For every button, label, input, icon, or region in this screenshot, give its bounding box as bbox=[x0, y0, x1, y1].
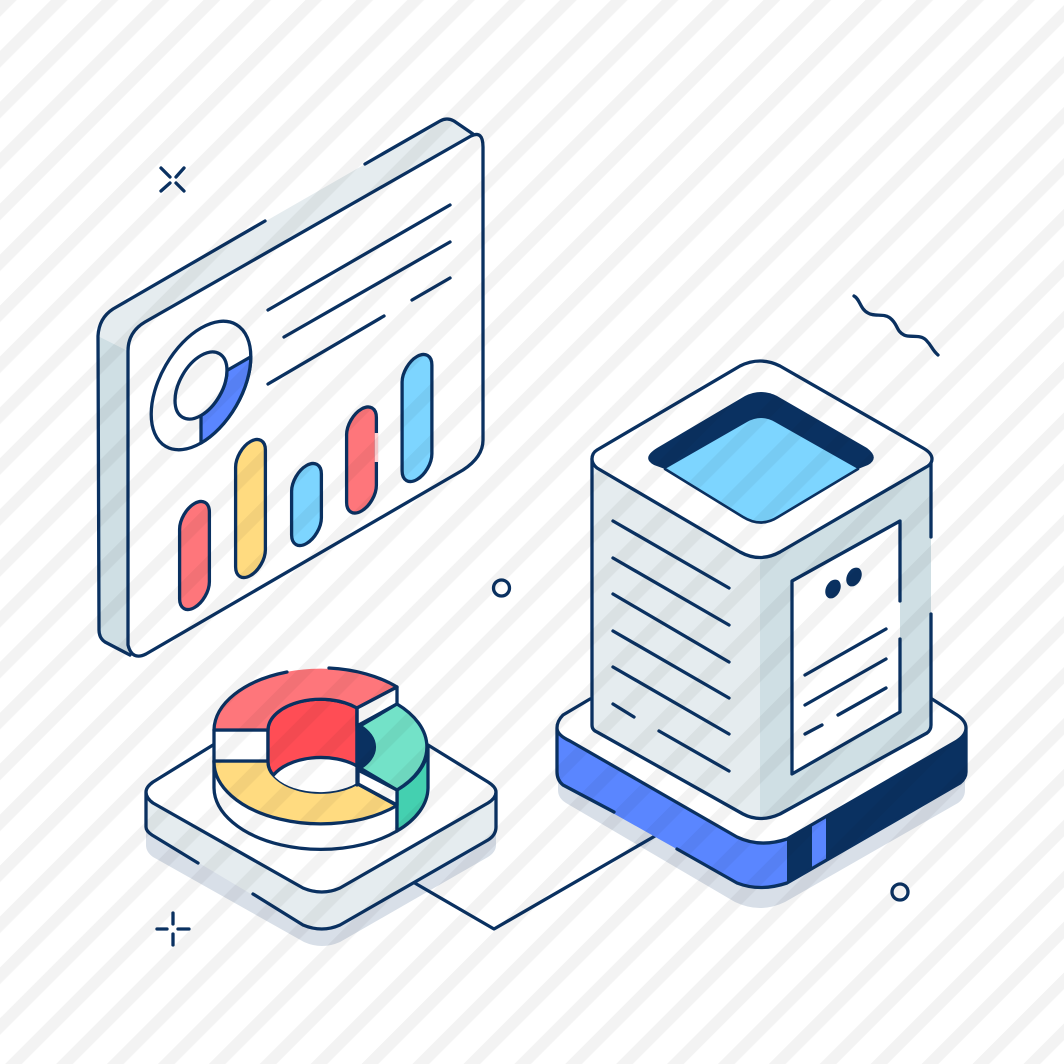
base top bbox=[557, 610, 966, 843]
server door bbox=[792, 521, 900, 774]
small platform shadow bbox=[146, 826, 496, 946]
platform side bbox=[146, 792, 496, 929]
server top face bbox=[592, 361, 932, 558]
dark crescent bbox=[357, 724, 374, 770]
dashboard side faces bbox=[98, 119, 473, 655]
base side stripe bbox=[812, 817, 826, 868]
server text lines bbox=[613, 521, 729, 771]
server outline bbox=[592, 459, 931, 818]
white wall under red bbox=[214, 730, 268, 761]
green top bbox=[360, 704, 427, 790]
server base shadow bbox=[558, 770, 965, 908]
base side dark bbox=[787, 728, 966, 883]
dashboard front face bbox=[128, 134, 483, 656]
platform outline bbox=[146, 745, 496, 929]
white base wall bbox=[214, 761, 397, 849]
yellow segment bbox=[214, 761, 397, 824]
icon: x sparkle bbox=[161, 168, 184, 191]
panel: dashboard bbox=[98, 119, 483, 656]
icon: small circle right bbox=[892, 884, 908, 900]
green side bbox=[397, 747, 428, 831]
icon: squiggle bbox=[854, 296, 938, 355]
panel: server bbox=[557, 361, 966, 888]
connector wire bbox=[413, 836, 655, 929]
red top outline bbox=[214, 668, 397, 730]
base side blue bbox=[557, 728, 787, 888]
text lines bbox=[268, 205, 450, 384]
white wedge bbox=[358, 770, 397, 805]
server right face bbox=[760, 459, 931, 819]
top opening lower edge bbox=[665, 469, 858, 522]
base outline bbox=[557, 699, 966, 888]
door dots bbox=[822, 577, 844, 601]
bar chart bbox=[180, 348, 432, 616]
icon: small circle centre bbox=[494, 580, 510, 596]
door text lines bbox=[805, 629, 886, 734]
server left face bbox=[592, 459, 760, 819]
donut chart bbox=[151, 299, 251, 472]
panel: small platform bbox=[146, 692, 496, 929]
divider line bbox=[355, 708, 359, 785]
white wall behind green bbox=[357, 687, 397, 726]
icon: plus sparkle bbox=[157, 913, 189, 945]
red top segment fill bbox=[214, 669, 397, 730]
top opening dark bbox=[648, 392, 874, 469]
deep red inner wall bbox=[268, 699, 357, 775]
platform top bbox=[146, 692, 496, 892]
top opening blue bbox=[665, 418, 858, 522]
3D donut chart bbox=[214, 668, 428, 849]
hole bbox=[273, 757, 357, 792]
